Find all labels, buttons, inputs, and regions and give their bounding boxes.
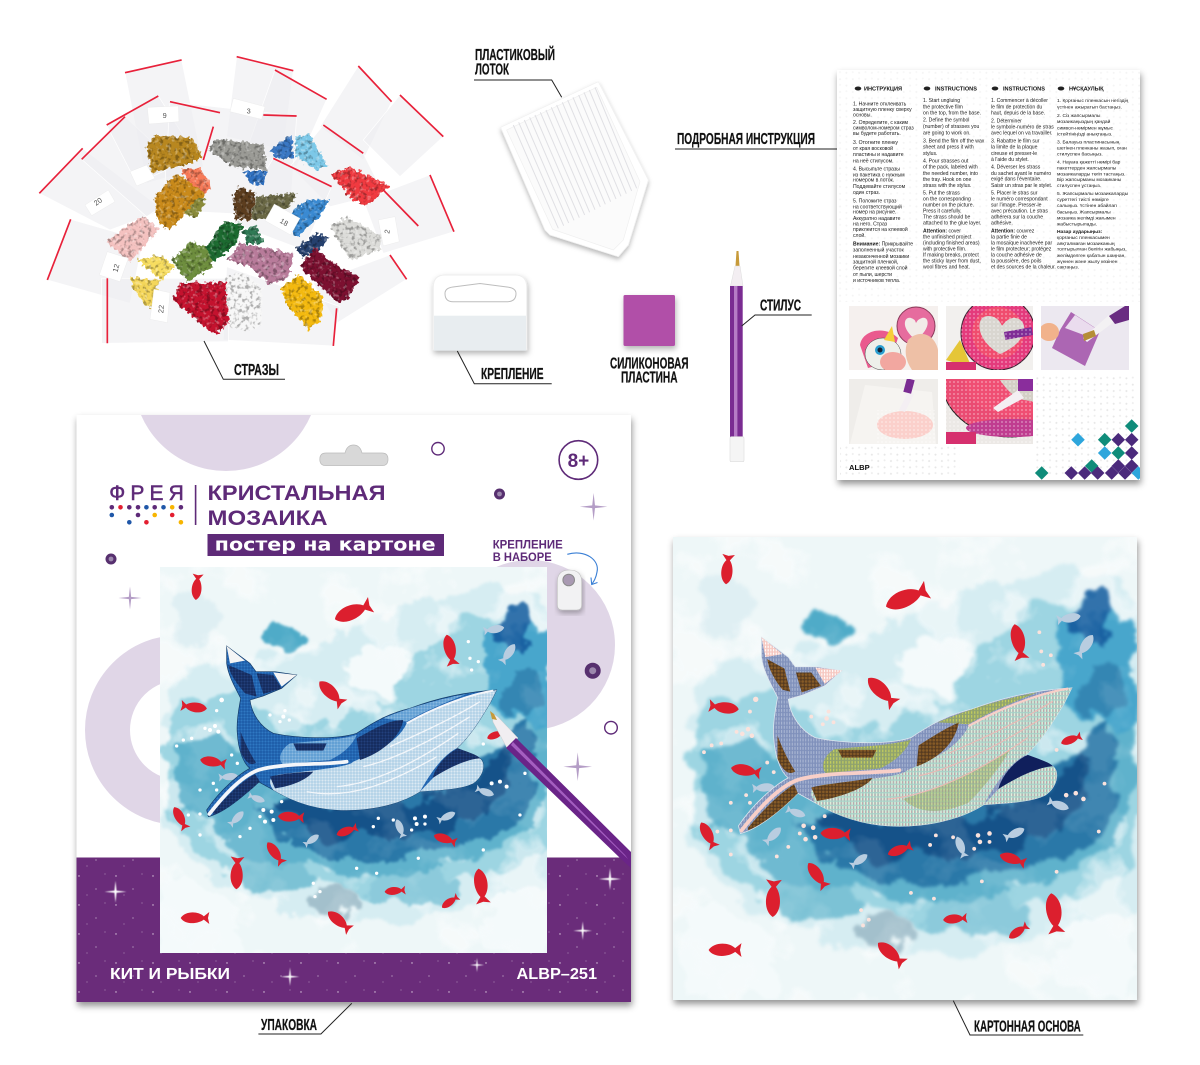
column: kazakh instructions: стилуспен ұстаңыз. — [1057, 184, 1101, 189]
whale: finished mosaic — [207, 646, 497, 817]
column: french instructions: couvrez — [1015, 228, 1035, 234]
column: french instructions: avec précaution. Le stras — [991, 208, 1048, 214]
column: kazakh instructions: мозаика желімді жағымен — [1057, 215, 1116, 221]
column: kazakh instructions: аяқталмаған мозаиканың — [1057, 242, 1115, 247]
column: kazakh instructions: желімделген қабатын шаңнан, — [1057, 253, 1126, 259]
column: english instructions: wool fibres and heat. — [923, 265, 970, 271]
column: russian instructions: из пакетика с нужным — [853, 172, 905, 178]
icon: silicone plate — [624, 295, 675, 346]
column: kazakh instructions: толтырылған бөлігін жабыңыз, — [1057, 247, 1127, 253]
column: french instructions: 4. Déverser les strass — [991, 165, 1041, 171]
column: russian instructions: пластины и надавите — [853, 152, 904, 158]
tag numbers: 9 — [163, 111, 167, 120]
column: russian instructions: основы. — [853, 113, 872, 119]
column: kazakh instructions: НҰСҚАУЛЫҚ — [1069, 86, 1104, 92]
icon: plastic tray — [501, 82, 648, 257]
photo 3: silicone plate in hand — [1039, 306, 1129, 370]
column: kazakh instructions: жүннен және жылу көзінен — [1057, 259, 1118, 265]
plastic zip bags — [39, 57, 454, 346]
age badge: 8+ — [568, 451, 589, 472]
column: english instructions: cover — [947, 228, 961, 234]
column: russian instructions: 5. Положите страз — [853, 198, 897, 204]
column: english instructions: 1. Start ungluing — [923, 98, 960, 104]
label: стразы — [204, 341, 285, 379]
label: упаковка — [258, 1003, 352, 1034]
column: english instructions: (including finished areas) — [923, 240, 980, 246]
stylus over package — [490, 711, 631, 868]
column: english instructions: number on the picture. — [923, 202, 974, 208]
column: french instructions: adhésive. — [991, 221, 1013, 227]
column: french instructions: avec lequel on va travailler. — [991, 131, 1052, 137]
column: kazakh instructions: істейтініңізді анықтаңыз. — [1057, 131, 1112, 138]
column: russian instructions: 3. Отогните пленку — [853, 140, 898, 146]
column: kazakh instructions: 3. Балауыз пластинасының — [1057, 139, 1120, 145]
column: english instructions: the unfinished project — [923, 234, 972, 240]
label: пластиковый лоток — [474, 45, 562, 97]
column: french instructions — [991, 86, 1056, 271]
label: упаковка: УПАКОВКА — [261, 1017, 317, 1034]
column: french instructions: cireuse et presser-le — [991, 151, 1037, 157]
column: english instructions: on the corresponding — [923, 196, 971, 202]
panel: package — [73, 414, 636, 1010]
tag numbers: 22 — [156, 305, 166, 313]
column: french instructions: le numéro correspondant — [991, 196, 1048, 202]
label: пластиковый лоток: ЛОТОК — [475, 62, 509, 78]
column: french instructions: Saisir un stras par le stylet. — [991, 183, 1052, 189]
beads, rings and sparkles — [106, 442, 617, 781]
column: russian instructions: Прикрывайте — [880, 241, 913, 248]
column: kazakh instructions: 2. Сіз жапсырмалы — [1057, 113, 1101, 119]
column: russian instructions: ИНСТРУКЦИЯ — [864, 86, 902, 92]
column: russian instructions: номер на рисунке. — [853, 210, 896, 216]
column: english instructions: with protective film. — [923, 246, 966, 252]
icon: hanging mount — [433, 275, 527, 351]
panel: instruction sheet — [837, 70, 1145, 480]
label: силиконовая пластина — [610, 355, 688, 387]
column: english instructions: 2. Define the symbol — [923, 118, 969, 124]
photo 4: pink beads tray — [849, 378, 938, 444]
column: kazakh instructions: үстінен ажыратып бастаңыз. — [1057, 104, 1122, 110]
column: russian instructions: один страз. — [853, 190, 880, 196]
column: kazakh instructions: салыңыз. Үстінен абайлап — [1057, 202, 1117, 209]
column: english instructions: are going to work on. — [923, 130, 971, 136]
mount note: В НАБОРЕ — [493, 552, 552, 564]
column: kazakh instructions: шетінен пленканы жазып, оған — [1057, 145, 1127, 151]
sheet brand: ALBP — [849, 463, 870, 472]
column: kazakh instructions: сақтаңыз. — [1057, 266, 1079, 271]
column: english instructions: If making breaks, protect — [923, 253, 979, 259]
column: russian instructions: незаконченной мозаики — [853, 253, 909, 260]
column: english instructions: on the top, from the base. — [923, 110, 981, 116]
tag numbers — [92, 106, 392, 313]
column: kazakh instructions: Бір жапсырманы мозаиканы — [1057, 177, 1122, 183]
column: kazakh instructions: стилуспен басыңыз. — [1057, 151, 1103, 157]
column: kazakh instructions — [1057, 86, 1129, 271]
column: english instructions — [923, 86, 985, 271]
tag numbers: 12 — [111, 263, 121, 273]
decorative diamond corner — [1035, 419, 1145, 480]
logo: ФРЕЯ — [109, 482, 184, 525]
column: russian instructions: Аккуратно надавите — [853, 216, 901, 222]
column: kazakh instructions: басыңыз. Жапсырмалы — [1057, 209, 1111, 215]
number tags — [85, 98, 399, 323]
label: силиконовая пластина: ПЛАСТИНА — [621, 370, 678, 387]
column: russian instructions: и источников тепла. — [853, 278, 900, 284]
poster image on package — [160, 567, 547, 953]
column: russian instructions: 2. Определите, с каким — [853, 120, 909, 126]
band sparkles — [104, 868, 621, 986]
title: кристальная мозаика — [208, 482, 386, 530]
column: english instructions: Attention: — [923, 228, 947, 234]
age badge — [559, 441, 598, 479]
column: russian instructions: берегите клеевой слой — [853, 264, 908, 271]
column: french instructions: le symbole-numéro de stras — [991, 125, 1054, 131]
column: russian instructions: вы будете работать. — [853, 131, 901, 137]
title: кристальная мозаика: МОЗАИКА — [208, 507, 328, 530]
column: russian instructions: Поддевайте стилусом — [853, 183, 906, 190]
label: силиконовая пластина: СИЛИКОНОВАЯ — [610, 355, 688, 372]
column: russian instructions: от края восковой — [853, 145, 893, 152]
photo 5: pink mosaic close-up — [946, 379, 1033, 444]
column: russian instructions: на неё стилусом. — [853, 158, 894, 164]
column: french instructions: le film de protection du — [991, 104, 1042, 110]
column: russian instructions: защитную пленку сверху — [853, 107, 912, 113]
mount note: КРЕПЛЕНИЕ — [493, 539, 563, 551]
tag numbers: 2 — [382, 229, 392, 234]
column: russian instructions: защитной пленкой, — [853, 259, 898, 266]
column: english instructions: the sticky layer from dust, — [923, 259, 981, 265]
column: english instructions: stylus. — [923, 151, 937, 157]
column: russian instructions: символом-номером страз — [853, 125, 914, 131]
column: french instructions: à l'aide du stylet. — [991, 157, 1029, 163]
bead piles — [105, 135, 390, 335]
title: кристальная мозаика: КРИСТАЛЬНАЯ — [208, 482, 386, 505]
column: english instructions: the tray. Hook on one — [923, 177, 971, 183]
column: french instructions: adhérera sur la couche — [991, 214, 1043, 220]
tag numbers: 3 — [247, 106, 251, 115]
column: french instructions: 5. Placer le stras sur — [991, 190, 1038, 196]
mount note — [493, 539, 598, 610]
column: russian instructions: на соответствующий — [853, 203, 902, 210]
column: russian instructions: Внимание: — [853, 242, 880, 248]
column: english instructions: the needed number, into — [923, 171, 978, 177]
column: french instructions: le film protecteur; protégez — [991, 246, 1052, 252]
banner: постер на картоне: постер на картоне — [215, 534, 436, 556]
column: english instructions: (number) of strasses you — [923, 124, 980, 130]
icon: stylus — [730, 251, 744, 462]
photo 1: unicorn and hand — [849, 306, 938, 372]
label: подробная инструкция: ПОДРОБНАЯ ИНСТРУКЦИЯ — [677, 131, 815, 148]
column: russian instructions: от пыли, шерсти — [853, 272, 892, 278]
column: kazakh instructions: Назар аударыңыз: — [1057, 229, 1103, 235]
column: russian instructions: приклеится на клеевой — [853, 226, 908, 233]
column: english instructions: the protective film — [923, 104, 963, 110]
column: french instructions: Attention: — [991, 228, 1015, 234]
column: french instructions: la couche adhésive de — [991, 253, 1042, 259]
column: kazakh instructions: мозаикаңыздың қандай — [1057, 118, 1111, 125]
photo 2: heart mosaic with stylus — [946, 306, 1033, 370]
column: french instructions: 3. Rabattre le film sur — [991, 139, 1040, 145]
column: russian instructions: на него. Страз — [853, 221, 888, 227]
column: french instructions: INSTRUCTIONS — [1003, 86, 1045, 92]
logo: ФРЕЯ: ФРЕЯ — [109, 482, 184, 505]
column: english instructions: sheet and press it with — [923, 145, 974, 151]
panel: rhinestone bags — [39, 57, 454, 346]
column: english instructions: of the pack, labeled with — [923, 165, 978, 171]
column: russian instructions: номером в лоток. — [853, 178, 894, 184]
column: russian instructions: 4. Высыпьте стразы — [853, 166, 900, 172]
whale: bare adhesive cardboard — [738, 637, 1072, 833]
column: french instructions: la partie finie de — [991, 234, 1027, 240]
column: english instructions: 5. Put the strass — [923, 190, 960, 196]
lilac background circles — [85, 415, 615, 823]
tag numbers: 20 — [92, 196, 104, 208]
label: стразы: СТРАЗЫ — [234, 362, 279, 379]
column: kazakh instructions: суреттегі тиісті нөмірге — [1057, 197, 1109, 203]
label: пластиковый лоток: ПЛАСТИКОВЫЙ — [475, 45, 555, 64]
column: kazakh instructions: пакеттерден жапсырмалы — [1057, 166, 1117, 171]
column: french instructions: la poussière, des poils — [991, 259, 1042, 265]
column: russian instructions: слой. — [853, 232, 866, 239]
column: english instructions: INSTRUCTIONS — [935, 86, 977, 92]
column: french instructions: la mosaïque inachevée par — [991, 240, 1052, 246]
column: french instructions: haut, depuis de la base. — [991, 110, 1045, 116]
column: kazakh instructions: символ-нөмірмен жұмыс — [1057, 125, 1114, 131]
column: french instructions: et des sources de la chaleur. — [991, 265, 1056, 271]
column: kazakh instructions: 1. Қорғаныс пленкасын негіздің — [1057, 98, 1129, 104]
column: kazakh instructions: жабыстырылады. — [1057, 221, 1097, 227]
label: стилус — [742, 298, 812, 326]
column: russian instructions: 1. Начните отклеивать — [853, 101, 907, 107]
column: kazakh instructions: мозаикаларды төгіп тастаңыз. — [1057, 171, 1126, 177]
column: english instructions: The strass should be — [923, 214, 970, 220]
column: english instructions: Press it carefully. — [923, 208, 961, 214]
label: картонная основа — [953, 1001, 1083, 1036]
column: english instructions: strass with the stylus. — [923, 183, 971, 189]
hanger slot — [320, 445, 388, 466]
column: english instructions: 4. Pour strasses out — [923, 159, 969, 165]
column: kazakh instructions: 5. Жапсырмалы мозаикаларды — [1057, 191, 1129, 197]
column: french instructions: exigé dans l'éventaire. — [991, 177, 1042, 183]
label: картонная основа: КАРТОННАЯ ОСНОВА — [974, 1019, 1081, 1036]
label: крепление: КРЕПЛЕНИЕ — [481, 366, 544, 383]
label: крепление — [457, 351, 552, 384]
column: french instructions: du sachet ayant le numéro — [991, 171, 1051, 177]
tag numbers: 18 — [278, 216, 290, 228]
purple bottom band — [76, 858, 631, 1002]
label: стилус: СТИЛУС — [760, 298, 801, 315]
column: french instructions: sur l'image. Presser-le — [991, 202, 1042, 208]
article number: ALBP–251 — [516, 966, 597, 983]
column: kazakh instructions: 4. Науаға қажетті нөмірі бар — [1057, 159, 1121, 165]
column: english instructions: 3. Bend the film off the wax — [923, 139, 985, 145]
column: english instructions: attached to the glue layer. — [923, 221, 981, 227]
column: french instructions: 1. Commencer à décoller — [991, 98, 1048, 104]
column: french instructions: la limite de la plaque — [991, 145, 1038, 151]
column: kazakh instructions: қорғаныс пленкасымен — [1057, 236, 1110, 241]
column: russian instructions — [853, 86, 914, 284]
panel: cardboard base — [662, 527, 1151, 1010]
red zip strips — [39, 57, 454, 346]
product name: КИТ И РЫБКИ — [110, 966, 230, 983]
column: french instructions: 2. Déterminer — [991, 118, 1022, 124]
column: russian instructions: заполненный участок — [853, 247, 905, 254]
